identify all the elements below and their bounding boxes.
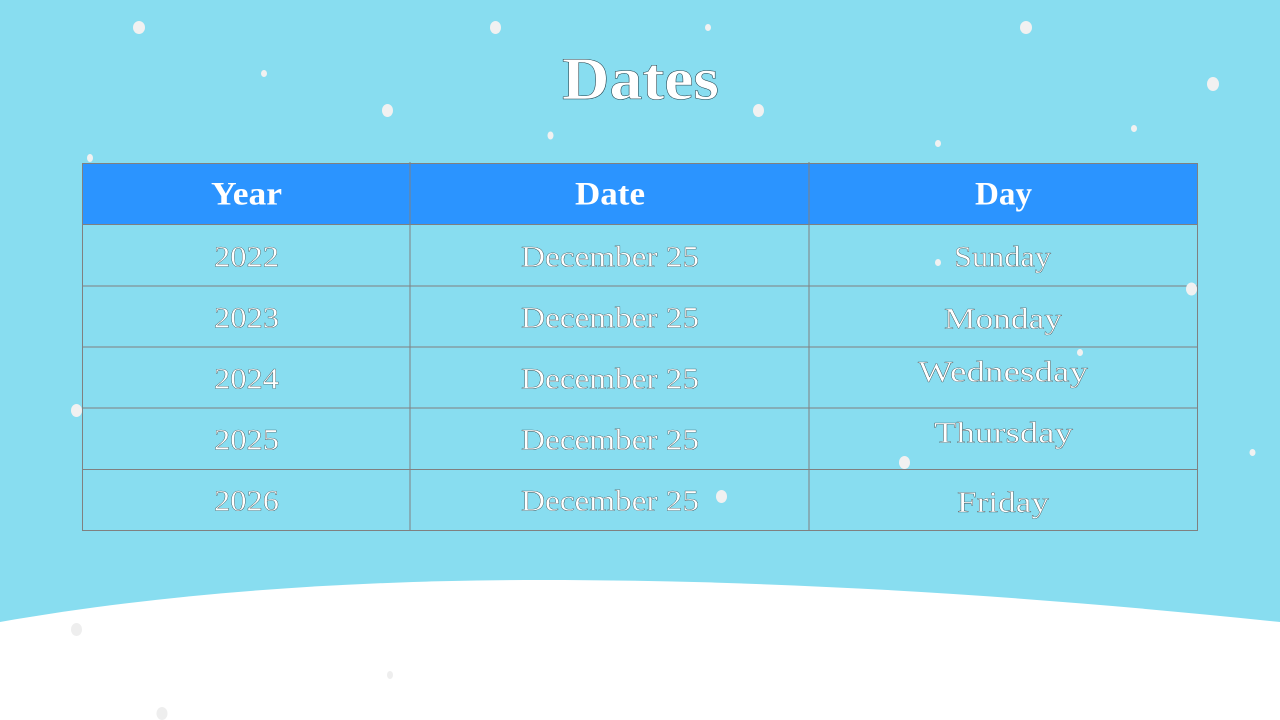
row 2024	[214, 356, 1088, 396]
row 2023: 2023	[214, 302, 279, 334]
row 2024: Wednesday	[918, 356, 1088, 388]
row 2026: Friday	[957, 486, 1049, 519]
row 2023	[214, 302, 1062, 336]
row 2022: 2022	[214, 240, 279, 274]
row 2023: December 25	[521, 302, 699, 334]
row 2024: 2024	[214, 362, 279, 396]
row 2026: 2026	[214, 484, 279, 518]
table header row: Date	[575, 176, 645, 212]
table header row: Day	[975, 176, 1032, 212]
row 2026: December 25	[521, 484, 699, 518]
row 2024: December 25	[521, 362, 699, 396]
row 2026	[214, 484, 1049, 519]
row 2025	[214, 416, 1073, 456]
title: Dates	[562, 46, 719, 112]
row 2022: December 25	[521, 240, 699, 274]
row 2025: 2025	[214, 424, 279, 456]
row 2022: Sunday	[954, 240, 1051, 274]
row 2025: Thursday	[934, 416, 1073, 450]
row 2023: Monday	[944, 302, 1062, 336]
table header row	[83, 163, 1197, 224]
snow hill	[0, 580, 1280, 720]
table	[82, 162, 1198, 531]
table header row: Year	[211, 176, 282, 212]
row 2022	[214, 240, 1051, 274]
row 2025: December 25	[521, 424, 699, 456]
